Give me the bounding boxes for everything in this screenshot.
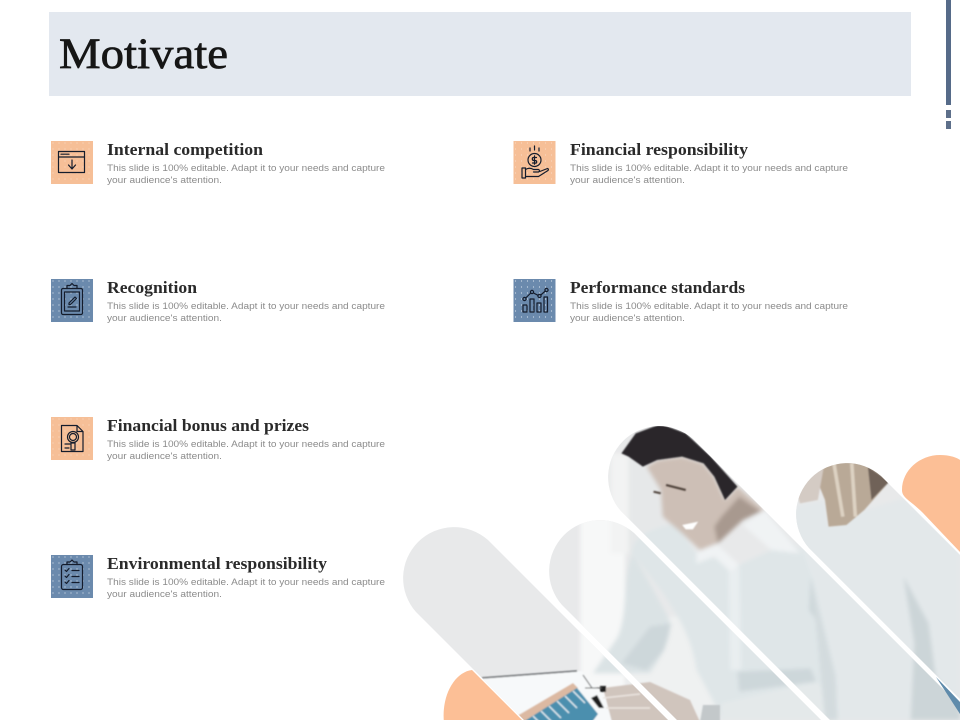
description: your audience's attention.: [107, 451, 222, 462]
photo: two colleagues reviewing a report, in diagonal pill shapes: [400, 420, 960, 720]
icon: checklist clipboard: [51, 555, 93, 598]
item: Internal competition: [51, 140, 385, 186]
header band: [49, 12, 911, 96]
heading: Financial bonus and prizes: [107, 416, 310, 435]
description: your audience's attention.: [107, 175, 222, 186]
icon: browser download: [51, 141, 93, 184]
description: This slide is 100% editable. Adapt it to your needs and capture: [107, 163, 385, 174]
description: This slide is 100% editable. Adapt it to your needs and capture: [570, 301, 848, 312]
description: your audience's attention.: [570, 175, 685, 186]
shape: peach pill bottom left: [444, 670, 525, 720]
icon: document with magnifier: [51, 417, 93, 460]
description: your audience's attention.: [107, 589, 222, 600]
item: Recognition: [51, 278, 385, 324]
title: Motivate: [59, 31, 228, 78]
heading: Environmental responsibility: [107, 554, 328, 573]
heading: Internal competition: [107, 140, 263, 159]
heading: Recognition: [107, 278, 197, 297]
item: Financial responsibility: [514, 140, 848, 186]
icon: clipboard with pen: [51, 279, 93, 322]
shape: blue sliver bottom right: [936, 677, 960, 714]
description: This slide is 100% editable. Adapt it to your needs and capture: [107, 439, 385, 450]
heading: Performance standards: [570, 278, 746, 297]
corner accent bar: [946, 0, 951, 129]
description: your audience's attention.: [570, 313, 685, 324]
icon: bar and line chart: [514, 279, 556, 322]
icon: hand holding coin: [514, 141, 556, 184]
shape: peach pill top right: [902, 455, 960, 552]
description: your audience's attention.: [107, 313, 222, 324]
item: Performance standards: [514, 278, 848, 324]
item: Financial bonus and prizes: [51, 416, 385, 462]
description: This slide is 100% editable. Adapt it to your needs and capture: [107, 301, 385, 312]
description: This slide is 100% editable. Adapt it to your needs and capture: [107, 577, 385, 588]
item: Environmental responsibility: [51, 554, 385, 600]
description: This slide is 100% editable. Adapt it to your needs and capture: [570, 163, 848, 174]
heading: Financial responsibility: [570, 140, 749, 159]
